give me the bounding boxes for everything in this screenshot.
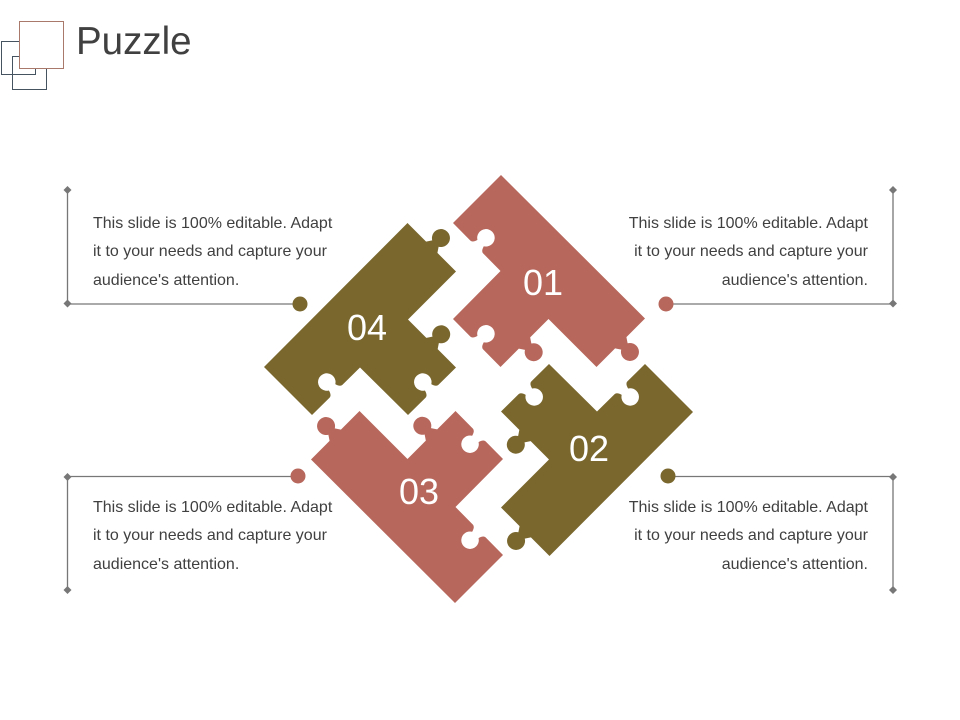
callout: bottom left: it to your needs and capture your	[93, 527, 328, 544]
callout: top left: it to your needs and capture your	[93, 243, 328, 260]
callout: top left	[64, 186, 333, 312]
puzzle piece 01	[453, 175, 645, 367]
callout: bottom left: audience's attention.	[93, 556, 239, 573]
puzzle piece 01: 01	[523, 262, 563, 303]
callout: top right: it to your needs and capture your	[634, 243, 869, 260]
puzzle piece 02	[501, 364, 693, 556]
puzzle piece 02: 02	[569, 428, 609, 469]
callout: bottom right: audience's attention.	[722, 556, 868, 573]
callout: top right	[629, 186, 897, 312]
puzzle piece 04	[264, 223, 456, 415]
callout: bottom right	[629, 468, 897, 594]
puzzle piece 03: 03	[399, 471, 439, 512]
callout: top right: audience's attention.	[722, 272, 868, 289]
callout: bottom right: This slide is 100% editable. Adapt	[629, 499, 869, 516]
callout: top right: This slide is 100% editable. Adapt	[629, 215, 869, 232]
header icon: overlapping squares	[2, 22, 64, 90]
callout: top left: This slide is 100% editable. Adapt	[93, 215, 333, 232]
callout: bottom right: it to your needs and capture your	[634, 527, 869, 544]
puzzle piece 04: 04	[347, 307, 387, 348]
callout: bottom left: This slide is 100% editable. Adapt	[93, 499, 333, 516]
title: Puzzle	[76, 20, 192, 63]
callout: top left: audience's attention.	[93, 272, 239, 289]
puzzle piece 03	[311, 411, 503, 603]
callout: bottom left	[64, 468, 333, 594]
